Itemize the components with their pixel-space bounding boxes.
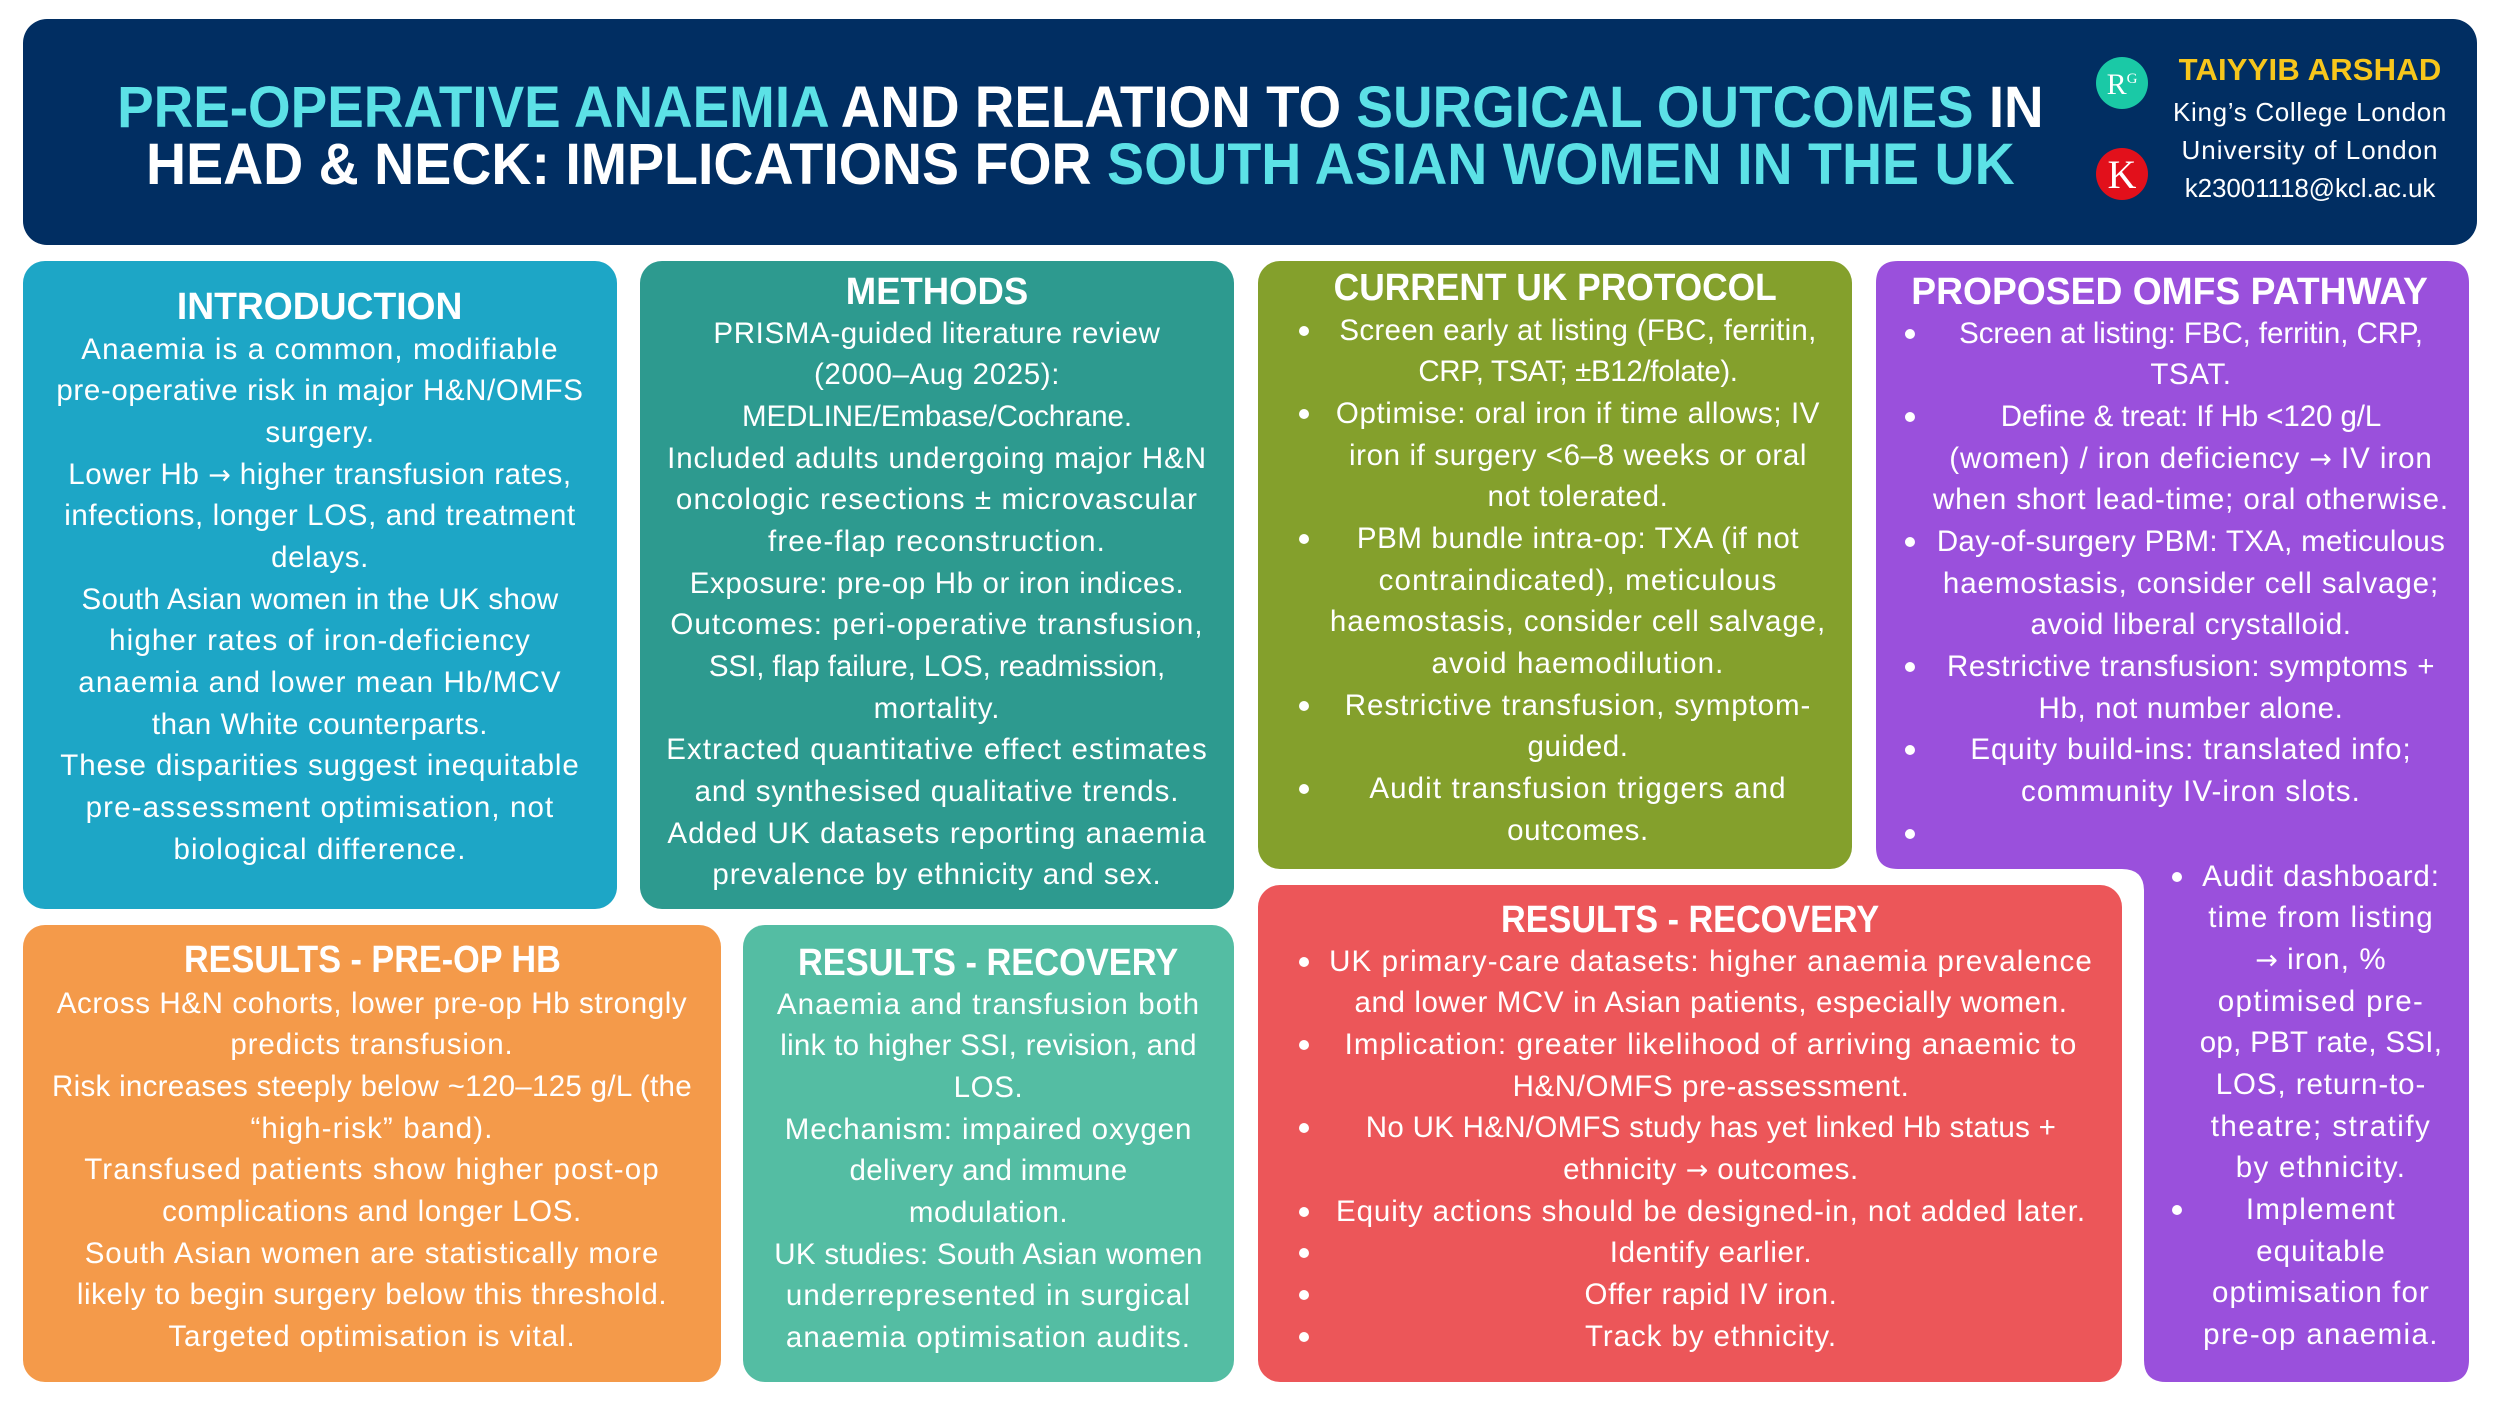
text: pathway bullets upper: avoid liberal crystalloid. — [2030, 608, 2352, 641]
text: introduction: than White counterparts. — [152, 708, 488, 741]
text: pathway bullets lower: equitable — [2256, 1235, 2386, 1268]
text: pathway bullets lower: optimised pre- — [2218, 985, 2424, 1018]
text: pathway bullets lower: time from listing — [2208, 901, 2434, 934]
text: results recovery: LOS. — [954, 1071, 1023, 1104]
text: pathway bullets upper: Hb, not number alone. — [2039, 692, 2343, 725]
text: pathway bullets upper: (women) / iron deficiency → IV iron — [1949, 442, 2433, 475]
text: methods: Added UK datasets reporting anaemia — [667, 817, 1207, 850]
icon: ResearchGate — [2096, 57, 2148, 109]
text: protocol bullets: Restrictive transfusion, symptom- — [1345, 689, 1811, 722]
text: red bullets: Track by ethnicity. — [1585, 1320, 1837, 1353]
text: results pre-op Hb: predicts transfusion. — [230, 1028, 514, 1061]
text: results pre-op Hb: Across H&N cohorts, lower pre-op Hb strongly — [57, 986, 687, 1020]
text: introduction: biological difference. — [173, 833, 467, 866]
text: results pre-op Hb: likely to begin surgery below this threshold. — [77, 1278, 667, 1311]
text: results pre-op Hb: “high-risk” band). — [250, 1112, 494, 1145]
text: introduction: pre-operative risk in major H&N/OMFS — [56, 374, 584, 407]
panel: results recovery (red) — [1258, 885, 2122, 1382]
text: methods: Exposure: pre-op Hb or iron indices. — [690, 567, 1184, 600]
text: pathway bullets upper: TSAT. — [2150, 358, 2232, 391]
affiliation: k23001118@kcl.ac.uk — [2185, 173, 2435, 203]
heading: introduction: INTRODUCTION — [177, 286, 463, 328]
text: pathway bullets upper: community IV-iron slots. — [2021, 775, 2361, 808]
text: methods: PRISMA-guided literature review — [713, 316, 1161, 350]
title: HEAD & NECK: IMPLICATIONS FOR SOUTH ASIAN WOMEN IN THE UK — [146, 132, 2014, 197]
author block — [2173, 52, 2447, 203]
text: protocol bullets: avoid haemodilution. — [1432, 647, 1724, 680]
text: pathway bullets upper: when short lead-time; oral otherwise. — [1933, 483, 2449, 516]
text: pathway bullets lower: op, PBT rate, SSI, — [2200, 1026, 2442, 1059]
text: introduction: Lower Hb → higher transfusion rates, — [68, 458, 572, 491]
text: results recovery: delivery and immune — [850, 1154, 1127, 1187]
text: protocol bullets: haemostasis, consider cell salvage, — [1330, 605, 1826, 638]
text: pathway bullets lower: Audit dashboard: — [2202, 860, 2440, 892]
panel: results pre-op Hb — [23, 925, 721, 1382]
text: protocol bullets: Screen early at listing (FBC, ferritin, — [1339, 314, 1817, 346]
text: introduction: infections, longer LOS, and treatment — [64, 499, 576, 532]
text: pathway bullets upper: Define & treat: If Hb <120 g/L — [2001, 400, 2381, 433]
text: results recovery — [774, 988, 1203, 1354]
text: red bullets: and lower MCV in Asian patients, especially women. — [1354, 986, 2068, 1019]
text: protocol bullets: not tolerated. — [1488, 480, 1668, 513]
text: results pre-op Hb: Transfused patients show higher post-op — [84, 1153, 660, 1186]
heading: current UK protocol: CURRENT UK PROTOCOL — [1333, 267, 1777, 309]
icon: ResearchGate: RG — [2107, 68, 2137, 101]
text: methods: (2000–Aug 2025): — [814, 358, 1060, 391]
text: methods: Extracted quantitative effect estimates — [666, 733, 1208, 766]
text: results recovery: link to higher SSI, revision, and — [780, 1029, 1197, 1062]
panel background: L-shaped — [1876, 261, 2469, 1382]
text: results pre-op Hb — [52, 986, 692, 1353]
text: pathway bullets lower: optimisation for — [2212, 1276, 2430, 1309]
text: introduction: higher rates of iron-deficiency — [109, 624, 531, 657]
heading: results recovery red: RESULTS - RECOVERY — [1501, 899, 1879, 941]
text: introduction: South Asian women in the UK show — [82, 583, 558, 616]
text: red bullets: Equity actions should be designed-in, not added later. — [1336, 1195, 2086, 1228]
text: pathway bullets lower: LOS, return-to- — [2216, 1068, 2426, 1101]
text: results pre-op Hb: complications and longer LOS. — [162, 1195, 582, 1228]
text: methods: mortality. — [874, 692, 1000, 725]
text: pathway bullets upper — [1905, 316, 2449, 839]
text: introduction — [56, 332, 584, 866]
text: methods: and synthesised qualitative trends. — [695, 775, 1179, 808]
text: red bullets: H&N/OMFS pre-assessment. — [1513, 1070, 1909, 1103]
text: red bullets: Offer rapid IV iron. — [1585, 1278, 1837, 1311]
text: pathway bullets lower: theatre; stratify — [2211, 1110, 2431, 1143]
text: red bullets: Implication: greater likelihood of arriving anaemic to — [1345, 1028, 2077, 1061]
text: red bullets — [1299, 944, 2093, 1353]
text: protocol bullets — [1299, 314, 1826, 847]
text: pathway bullets upper: Equity build-ins: translated info; — [1970, 733, 2412, 766]
text: results recovery: Mechanism: impaired oxygen — [785, 1113, 1192, 1146]
text: pathway bullets upper: Restrictive transfusion: symptoms + — [1947, 650, 2435, 683]
panel: introduction — [23, 261, 617, 909]
text: results pre-op Hb: South Asian women are statistically more — [85, 1237, 659, 1270]
affiliation — [2173, 97, 2447, 203]
text: methods: SSI, flap failure, LOS, readmission, — [709, 650, 1165, 683]
heading: results recovery: RESULTS - RECOVERY — [798, 942, 1179, 984]
text: pathway bullets lower: pre-op anaemia. — [2203, 1318, 2439, 1351]
text: introduction: delays. — [271, 541, 369, 574]
text: methods: Outcomes: peri-operative transfusion, — [670, 608, 1204, 641]
title: PRE-OPERATIVE ANAEMIA AND RELATION TO SURGICAL OUTCOMES IN — [117, 75, 2043, 140]
affiliation: King’s College London — [2173, 97, 2447, 127]
text: results recovery: UK studies: South Asian women — [774, 1238, 1203, 1271]
heading: methods: METHODS — [846, 271, 1028, 313]
icon: King's College London: K — [2108, 152, 2136, 197]
text: results recovery: Anaemia and transfusion both — [777, 988, 1200, 1020]
text: pathway bullets upper: haemostasis, consider cell salvage; — [1943, 567, 2439, 600]
text: pathway bullets upper: Screen at listing: FBC, ferritin, CRP, — [1959, 316, 2423, 350]
panel: proposed OMFS pathway — [1876, 261, 2469, 1382]
author name: TAIYYIB ARSHAD — [2179, 52, 2441, 87]
text: protocol bullets: CRP, TSAT; ±B12/folate). — [1418, 355, 1738, 388]
text: methods: free-flap reconstruction. — [768, 525, 1106, 558]
heading: proposed OMFS pathway: PROPOSED OMFS PATHWAY — [1912, 271, 2428, 313]
text: introduction: Anaemia is a common, modifiable — [81, 332, 559, 366]
text: pathway bullets lower — [2172, 860, 2442, 1351]
text: methods: prevalence by ethnicity and sex. — [712, 858, 1162, 891]
text: results recovery: modulation. — [909, 1196, 1068, 1229]
text: results recovery: underrepresented in surgical — [786, 1279, 1191, 1312]
heading: results pre-op Hb: RESULTS - PRE-OP HB — [184, 939, 560, 981]
text: methods: Included adults undergoing major H&N — [667, 442, 1207, 475]
title — [117, 75, 2043, 197]
text: results pre-op Hb: Targeted optimisation is vital. — [168, 1320, 576, 1353]
text: introduction: pre-assessment optimisation, not — [86, 791, 554, 824]
panel: methods — [640, 261, 1234, 909]
text: pathway bullets lower: Implement — [2246, 1193, 2396, 1226]
header banner — [23, 19, 2477, 245]
text: red bullets: UK primary-care datasets: higher anaemia prevalence — [1329, 944, 2093, 978]
text: protocol bullets: iron if surgery <6–8 weeks or oral — [1349, 439, 1807, 472]
affiliation: University of London — [2181, 135, 2439, 165]
panel: current UK protocol — [1258, 261, 1852, 869]
text: introduction: These disparities suggest inequitable — [60, 749, 580, 782]
text: methods: oncologic resections ± microvascular — [676, 483, 1198, 516]
text: red bullets: No UK H&N/OMFS study has yet linked Hb status + — [1366, 1111, 2056, 1144]
text: results pre-op Hb: Risk increases steeply below ~120–125 g/L (the — [52, 1070, 692, 1103]
panel: results recovery (teal) — [743, 925, 1234, 1382]
text: pathway bullets lower: by ethnicity. — [2236, 1151, 2406, 1184]
text: introduction: anaemia and lower mean Hb/MCV — [78, 666, 562, 699]
text: methods — [666, 316, 1208, 891]
icon: King's College London — [2096, 148, 2148, 200]
text: protocol bullets: contraindicated), meticulous — [1379, 564, 1777, 597]
text: protocol bullets: outcomes. — [1507, 814, 1649, 847]
text: pathway bullets upper: Day-of-surgery PBM: TXA, meticulous — [1937, 525, 2445, 558]
text: introduction: surgery. — [265, 416, 375, 449]
text: pathway bullets lower: → iron, % — [2255, 943, 2387, 976]
text: protocol bullets: PBM bundle intra-op: TXA (if not — [1357, 522, 1799, 555]
text: protocol bullets: Optimise: oral iron if time allows; IV — [1336, 397, 1820, 430]
text: protocol bullets: Audit transfusion triggers and — [1369, 772, 1787, 805]
text: results recovery: anaemia optimisation audits. — [786, 1321, 1191, 1354]
text: red bullets: Identify earlier. — [1610, 1236, 1812, 1269]
text: protocol bullets: guided. — [1527, 730, 1629, 763]
text: methods: MEDLINE/Embase/Cochrane. — [742, 400, 1132, 433]
text: red bullets: ethnicity → outcomes. — [1563, 1153, 1859, 1186]
